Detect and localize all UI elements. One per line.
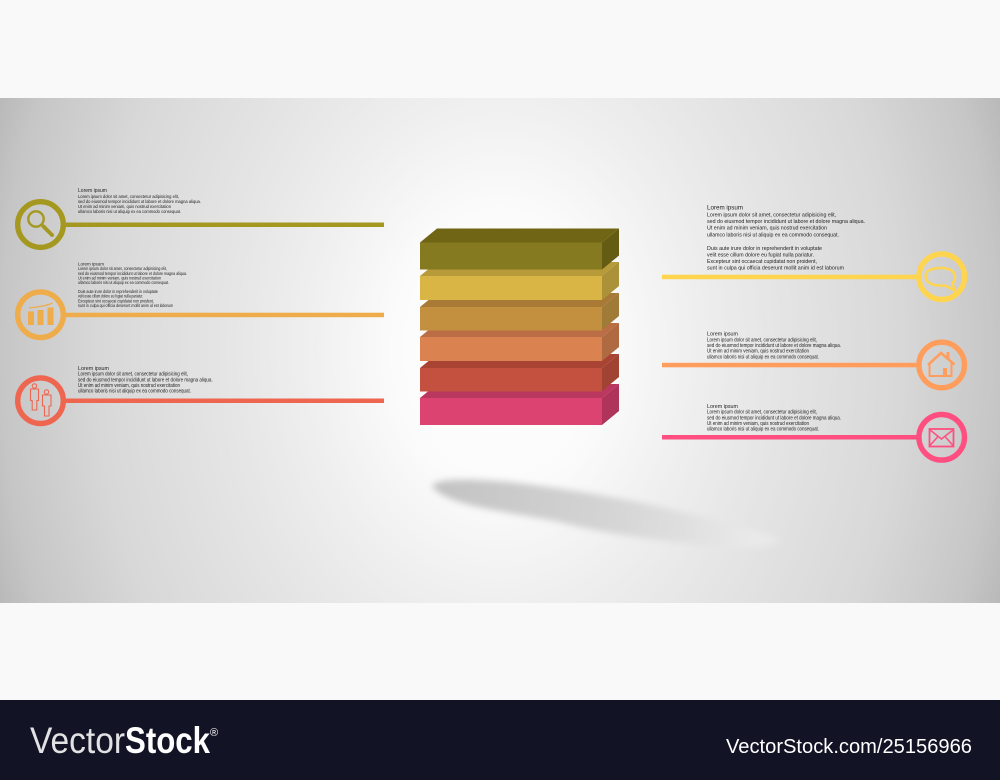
- text block: ullamco laboris nisi ut aliquip ex ea commodo consequat.: [78, 209, 181, 215]
- text block: Lorem ipsum: [707, 205, 743, 212]
- stacked 3D blocks: [420, 228, 619, 425]
- text block: [707, 205, 865, 272]
- text block: Lorem ipsum: [78, 366, 109, 372]
- text block: Lorem ipsum dolor sit amet, consectetur adipisicing elit,: [707, 337, 817, 343]
- text block: Lorem ipsum dolor sit amet, consectetur adipisicing elit,: [78, 266, 167, 271]
- icon: house: [919, 342, 964, 388]
- text block: Ut enim ad minim veniam, quis nostrud exercitation: [707, 421, 809, 427]
- block 6: pink: [420, 384, 619, 425]
- block 3: ochre: [420, 293, 619, 330]
- text block: sed do eiusmod tempor incididunt ut labore et dolore magna aliqua.: [707, 415, 841, 421]
- block 1: olive: [420, 228, 619, 270]
- connector line: [662, 363, 919, 367]
- text block: sed do eiusmod tempor incididunt ut labore et dolore magna aliqua.: [707, 219, 865, 225]
- text block: sed do eiusmod tempor incididunt ut labore et dolore magna aliqua.: [78, 377, 213, 383]
- block 2: yellow: [420, 262, 619, 300]
- text block: Lorem ipsum: [707, 404, 738, 410]
- text block: sunt in culpa qui officia deserunt mollit anim id est laborum: [707, 266, 844, 272]
- text block: Lorem ipsum: [78, 262, 104, 267]
- text block: Excepteur sint occaecat cupidatat non proident,: [78, 298, 154, 303]
- text block: sed do eiusmod tempor incididunt ut labore et dolore magna aliqua.: [707, 343, 841, 349]
- icon: envelope: [919, 414, 964, 460]
- icon: bar chart: [18, 292, 63, 338]
- connector line: [662, 275, 919, 279]
- text block: Lorem ipsum dolor sit amet, consectetur adipisicing elit,: [78, 372, 188, 378]
- text block: Lorem ipsum dolor sit amet, consectetur adipisicing elit,: [78, 194, 179, 200]
- text block: velit esse cillum dolore eu fugiat nulla pariatur.: [78, 294, 143, 299]
- text block: velit esse cillum dolore eu fugiat nulla pariatur.: [707, 252, 814, 258]
- text block: Lorem ipsum dolor sit amet, consectetur adipisicing elit,: [707, 410, 817, 416]
- footer image id: VectorStock.com/25156966: [726, 736, 972, 758]
- text block: sunt in culpa qui officia deserunt mollit anim id est laborum: [78, 303, 173, 308]
- text block: ullamco laboris nisi ut aliquip ex ea commodo consequat.: [707, 427, 819, 433]
- text block: Ut enim ad minim veniam, quis nostrud exercitation: [78, 383, 180, 389]
- text block: ullamco laboris nisi ut aliquip ex ea commodo consequat.: [78, 280, 169, 285]
- text block: sed do eiusmod tempor incididunt ut labore et dolore magna aliqua.: [78, 199, 201, 205]
- block 4: orange: [420, 323, 619, 361]
- connector line: [64, 398, 384, 403]
- text block: [78, 262, 187, 308]
- connector line: [64, 222, 384, 227]
- connector line: [662, 435, 919, 440]
- footer logo: Stock: [125, 720, 210, 761]
- text block: [78, 366, 213, 395]
- footer logo: [30, 720, 218, 761]
- text block: Ut enim ad minim veniam, quis nostrud exercitation: [78, 276, 162, 280]
- text block: Lorem ipsum dolor sit amet, consectetur adipisicing elit,: [707, 212, 836, 218]
- text block: Lorem ipsum: [78, 188, 107, 194]
- text block: Ut enim ad minim veniam, quis nostrud exercitation: [707, 349, 809, 355]
- left item 1: [18, 188, 384, 247]
- text block: Excepteur sint occaecat cupidatat non proident,: [707, 259, 817, 265]
- floating stack shadow: [432, 480, 782, 548]
- text block: Ut enim ad minim veniam, quis nostrud exercitation: [707, 226, 827, 232]
- right item 1: [662, 205, 964, 300]
- text block: Ut enim ad minim veniam, quis nostrud exercitation: [78, 204, 171, 210]
- text block: [78, 188, 201, 215]
- icon: magnifier: [18, 202, 63, 247]
- text block: Duis aute irure dolor in reprehenderit in voluptate: [707, 246, 822, 252]
- right item 2: [662, 332, 964, 388]
- text block: [707, 404, 841, 433]
- left item 2: [18, 262, 384, 338]
- text block: [707, 332, 841, 360]
- icon: speech bubble: [919, 254, 964, 300]
- footer bar: [0, 700, 1000, 780]
- text block: ullamco laboris nisi ut aliquip ex ea commodo consequat.: [78, 389, 191, 395]
- text block: Lorem ipsum: [707, 332, 738, 338]
- text block: ullamco laboris nisi ut aliquip ex ea commodo consequat.: [707, 232, 839, 238]
- top band: [0, 0, 1000, 98]
- text block: ullamco laboris nisi ut aliquip ex ea commodo consequat.: [707, 354, 819, 360]
- footer logo: ®: [210, 727, 218, 739]
- footer logo: Vector: [30, 720, 125, 761]
- bottom band: [0, 603, 1000, 700]
- icon: two people: [18, 378, 63, 424]
- right item 3: [662, 404, 964, 460]
- block 5: red: [420, 354, 619, 392]
- text block: Duis aute irure dolor in reprehenderit in voluptate: [78, 289, 159, 294]
- connector line: [64, 313, 384, 317]
- left item 3: [18, 366, 384, 424]
- gradient background panel: [0, 98, 1000, 603]
- text block: sed do eiusmod tempor incididunt ut labore et dolore magna aliqua.: [78, 271, 187, 276]
